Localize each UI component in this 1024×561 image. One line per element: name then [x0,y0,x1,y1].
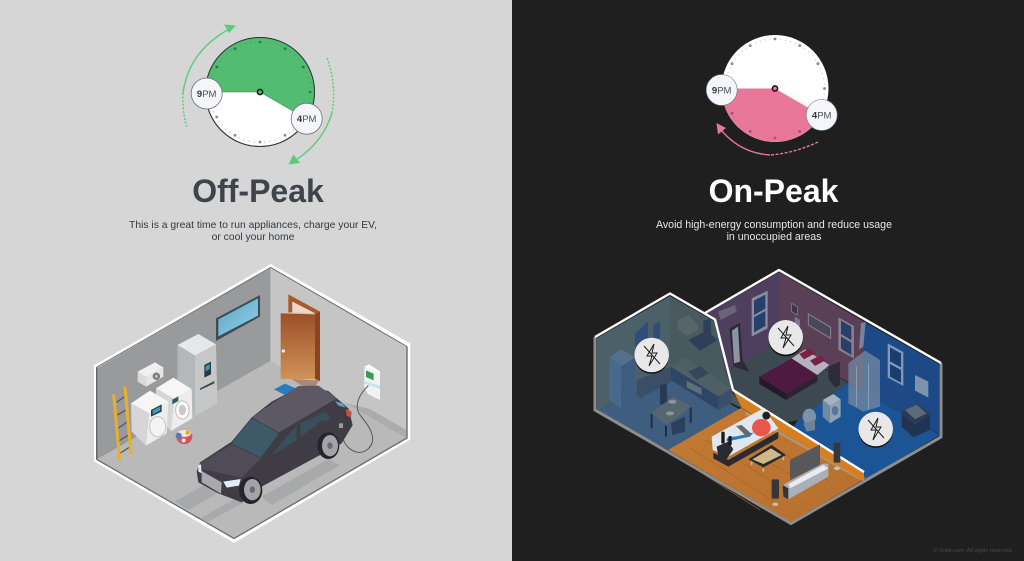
kitchen room [597,296,748,450]
washing machine left [131,391,168,446]
panel: on-peak background [512,0,1024,561]
washing machine right [156,378,192,431]
text: on-peak description: Avoid high-energy consumption and reduce usage [656,219,892,231]
icon: no power, kitchen [634,338,669,374]
bedroom room [706,272,863,425]
living room floor [668,391,866,522]
car headlight [223,479,241,488]
window [216,295,260,341]
car roof [252,386,337,432]
car windshield [232,418,279,457]
on-peak clock [706,35,837,155]
hour markers [215,41,311,143]
heading: Off-Peak: Off-Peak [192,173,324,209]
white wall lines [595,270,941,472]
kitchen range hood [688,318,718,351]
illustration: garage [95,265,409,542]
charging cable [340,386,373,452]
clock face [722,35,828,142]
heading: On-Peak: On-Peak [709,173,839,209]
laundry basket [176,429,192,444]
home side edges [595,337,941,524]
hour markers [731,38,826,139]
bathroom vanity [900,403,932,437]
car front wheel [239,477,262,504]
car grille [202,471,222,494]
copyright note: © Solar.com. All rights reserved. [933,547,1013,554]
EV wall charger [364,364,380,400]
icon: no power, bedroom [768,320,803,356]
fridge [177,334,217,417]
car rear wheel [317,432,339,459]
arrow: right clockwise [288,58,334,164]
car side windows [272,401,346,455]
arrow: on-peak clockwise [716,123,818,155]
illustration: home [595,270,941,524]
bathroom shower [848,351,880,412]
bedroom window [752,291,768,337]
kitchen counter [637,357,732,410]
tyre tracks on floor [175,459,340,523]
text: off-peak description: This is a great time to run appliances, charge your EV, [129,220,377,231]
car tail light [346,409,352,418]
sofa [712,408,778,467]
bathroom room [790,321,940,479]
bedroom far window [838,317,854,358]
garage walls and floor [96,268,407,538]
kitchen door and window [635,322,660,355]
panel: off-peak background [0,0,512,561]
coffee table [748,445,786,472]
badge: 9PM: 9PM [197,89,217,100]
text: on-peak description: in unoccupied areas [727,231,821,243]
badge: 9PM [191,78,222,109]
floor mat [274,384,296,395]
toilet [803,409,816,432]
icon: no power, bathroom [858,412,893,448]
bathroom window [888,343,903,386]
car hood [200,444,261,478]
ladder [114,387,131,460]
air conditioner unit [138,362,163,387]
bedroom mirror [729,323,749,372]
badge: 4PM: 4PM [297,114,317,125]
garage outline [95,265,409,542]
off-peak clock [183,24,334,164]
badge: 9PM: 9PM [712,86,732,96]
badge: 4PM: 4PM [812,110,832,122]
door [281,294,320,387]
washing machine [823,394,841,423]
bedroom air conditioner [718,305,737,320]
clock centre [772,86,778,91]
dining table and chairs [651,384,692,437]
speakers [772,443,840,506]
pink on-peak wedge [722,88,821,142]
clock face [206,38,314,146]
kitchen wall cabinet [678,315,698,336]
car charge port [339,423,343,428]
badge: 4PM [291,103,322,134]
arrow: left clockwise [183,24,236,127]
bathroom divider light [859,322,866,349]
green off-peak wedge [205,37,314,119]
kitchen fridge [609,349,635,408]
person on sofa [721,412,771,445]
clock centre [257,89,263,95]
television and stand [783,444,828,499]
car [197,386,353,504]
bed [759,348,840,400]
bedroom pictures [792,303,831,338]
bathroom wall cabinet [915,375,928,397]
text: off-peak description: or cool your home [212,232,295,243]
